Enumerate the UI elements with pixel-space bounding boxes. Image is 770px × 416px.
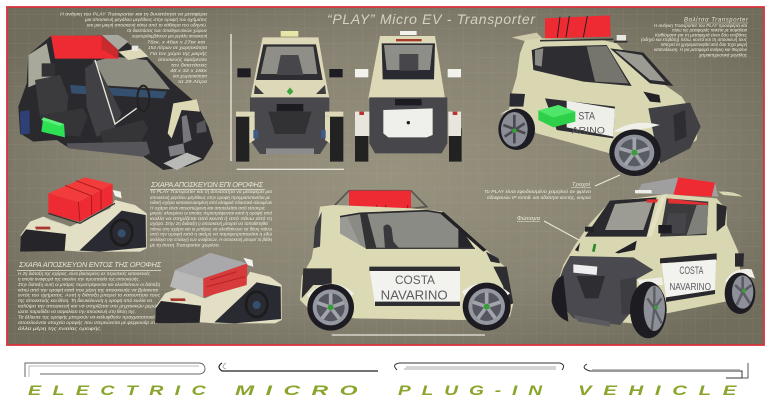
text: roof storage description: και χωρητικότητα [173, 74, 208, 78]
text: roof storage description: 154 Λίτρων σε χωρητικότητα [148, 45, 208, 50]
text: inside-roof storage description: Τα έλλειπε της οροφής μπορούν να καλυφθούν πραγματοποιείται [18, 314, 160, 320]
bottom title: electric micro plug-in vehicle [28, 382, 748, 398]
callout: wheels [484, 175, 620, 200]
front view of car with dimension lines [236, 31, 344, 169]
text: inside-roof storage description [17, 271, 161, 331]
text: roof rack description: κοιλία να στηρίζεται από κοντά ή από πάνω από τη [150, 216, 273, 221]
text: roof storage description: Οι διαστάσεις των αποθηκευτικών χώρων [127, 28, 208, 33]
title: “PLAY” Micro EV - Transporter [327, 11, 536, 27]
bottom title: electric micro plug-in vehicle: PLUG-IN [398, 382, 553, 398]
text: roof rack description: ειδική σχάρα κατασκευασμένη από ελαφριά πλαστικά αλουμίνιο [150, 200, 273, 205]
text: luggage transporter description [641, 18, 749, 58]
text: roof storage description: αποσκευής αφαίρεσαν [158, 57, 208, 62]
text: roof rack description: ανάλογα την επιλογή των αναβατών. Η αποσκευή μπορεί τα βάθη [150, 237, 273, 242]
text: inside-roof storage description: αποτελούνται στοιχεία οροφής που στερεώνεται με φερμουάρ στα [18, 320, 159, 325]
side view car with branded panel: COSTA [395, 273, 435, 287]
text: roof rack description [149, 189, 273, 248]
text: inside-roof storage description: ώστε παραδίδει να ασφαλίσει την αποσκευή στη θέση της. [18, 309, 136, 314]
text: inside-roof storage description: Στην διάταξη αυτή οι μπάρες περιστρέφονται και ολισθαίνουν οι διάταξη [17, 282, 161, 287]
text: inside-roof storage description: κάτω από την οροφή κατά που μέρη της αποσκευής να βρίσκεται [18, 288, 158, 292]
text: roof rack description: από την οροφή κατά η ακόμη να παραμετροποιείται η εδώ [150, 232, 273, 236]
roof crop with red boxes on rack [20, 177, 147, 252]
bottom right three-quarter view car: NAVARINO [669, 282, 711, 293]
callout: wheels: αδιαφανών IP τοποθ. και αδιάτητα κοντής, καιρού [487, 195, 592, 200]
cutaway car with storage spaces [18, 35, 213, 170]
rear view of car [355, 31, 462, 162]
text: luggage transporter description: Μπορεί τα χρησιμοποιηθεί από δύο Έχει μικρή [661, 42, 748, 47]
text: inside-roof storage description: καλύψει την αποσκευή και να στηρίζεται στο μηχανικών μερών [18, 304, 161, 308]
text: luggage transporter description: (οδηγό και επιβάτη) πίσω, κοντά και τη αποσκευή τους [641, 37, 748, 42]
text: roof rack description: σχάρα. Στην 2η διάταξη η αποσκευή μπορεί να τοποθετηθεί [150, 221, 269, 226]
bottom decorative bracket segments [25, 363, 748, 378]
roof crop with box inside roof [155, 253, 282, 323]
text: inside-roof storage description: η οποία αναφορά της ακούνε την προστασία της αποσκευής. [18, 276, 140, 282]
text: roof storage description: Για τον χώρο της μικρής [150, 51, 208, 56]
callout: wheels: Τροχοί [572, 182, 591, 188]
callout: wheels: Το PLAY είναι εφοδιασμένο χαμηλού αν φρένα [484, 189, 592, 194]
bottom right three-quarter view car [552, 177, 755, 338]
bottom title: electric micro plug-in vehicle: MICRO [235, 382, 369, 398]
text: inside-roof storage description: της αποσκευής και θέση. Τη διευκόλυνση η οροφή από κοιλία να [18, 298, 153, 303]
text: luggage transporter description: Καθίσματα για τη μεταφορά είναι δύο επιβάτες [655, 32, 748, 38]
text: luggage transporter description: Βαλίτσα Transporter [684, 18, 749, 24]
heading: roof rack storage: ΣΧΑΡΑ ΑΠΟΣΚΕΥΩΝ ΕΠΙ ΟΡΟΦΗΣ [150, 180, 264, 189]
text: roof rack description: πάνω στη σχάρα και οι μπάρες να ολισθαίνουν σε θέση πάνω [150, 226, 273, 232]
text: roof storage description: συμπεριλαμβάνουν μια μεγάλη αποσκευή [132, 34, 208, 38]
top right car with roof boxes and side compartment: STA [578, 110, 596, 122]
heading: storage inside the roof: ΣΧΑΡΑ ΑΠΟΣΚΕΥΩΝ ΕΝΤΟΣ ΤΗΣ ΟΡΟΦΗΣ [18, 260, 162, 269]
side view car with branded panel [300, 191, 513, 335]
top right car with roof boxes and side compartment: ARINO [572, 125, 605, 135]
text: roof rack description: με τη άνετη Transporter χωρίσει. [149, 242, 220, 248]
text: roof storage description: και μια μικρή αποσκευή κάτω από το κάθισμα του οδηγού. [87, 22, 207, 28]
bottom right three-quarter view car: COSTA [679, 265, 704, 277]
text: luggage transporter description: κατανάλωση. Η για μεταφορά ανάγκη και Φορτίου [654, 47, 748, 52]
text: roof storage description: μια αποσκευή μεγάλου μεγέθους στην οροφή του οχήματος [84, 17, 208, 22]
bottom title: electric micro plug-in vehicle: VEHICLE [578, 382, 748, 398]
text: roof rack description: μικρές αλουμίνιο οι οποίες περιστρέφονται κατά η οροφή από [149, 210, 273, 216]
text: luggage transporter description: χαρακτηριστικά μεγάλης [698, 52, 748, 58]
text: roof storage description: 48 x 32 x 18εκ [170, 68, 208, 73]
side view car with branded panel: NAVARINO [381, 288, 448, 302]
text: roof storage description: τον διαστάσεις [171, 62, 208, 68]
text: luggage transporter description: Η ανάγκη Transporter του PLAY προσφέρει και [654, 23, 747, 28]
text: roof storage description: 76εκ. x 46εκ x 27εκ και [147, 40, 205, 44]
text: roof storage description: Η ανάγκη του PLAY Transporter και τη δυνατότητα να μεταφέρει [60, 12, 207, 16]
text: inside-roof storage description: εντός του οχήματος. Αυτή η διάταξη μπορεί το καταστήσει τους [18, 292, 161, 298]
text: inside-roof storage description: Η 2η διάταξη της σχάρας, είναι βασισμένη σε περιστικές κατασκευές [18, 271, 151, 276]
top right car with roof boxes and side compartment [498, 15, 701, 176]
text: roof storage description [60, 12, 208, 84]
callout: lighting [517, 215, 590, 246]
height dimension line [230, 34, 232, 161]
text: roof rack description: αποσκευή μεγάλου μεγέθους στην οροφή πραγματοποιείται με [150, 195, 270, 200]
callout: lighting: Φώτισμα [517, 215, 541, 222]
text: luggage transporter description: πίσω της μεταφοράς πακέτα με ασφάλεια [672, 28, 747, 32]
text: roof storage description: τα 29 Λίτρα [178, 79, 208, 84]
background panel with red border [7, 7, 764, 345]
text: inside-roof storage description: άλλα μέρη της ενιαίας οροφής. [18, 326, 102, 331]
text: roof rack description: Η σχάρα είναι αποσπώμενη και αποτελείται από τέσσερις [150, 206, 266, 210]
text: roof rack description: Το PLAY Transporter και τη δυνατότητα να μεταφέρει μια [150, 189, 273, 194]
bottom title: electric micro plug-in vehicle: ELECTRIC [28, 382, 217, 398]
